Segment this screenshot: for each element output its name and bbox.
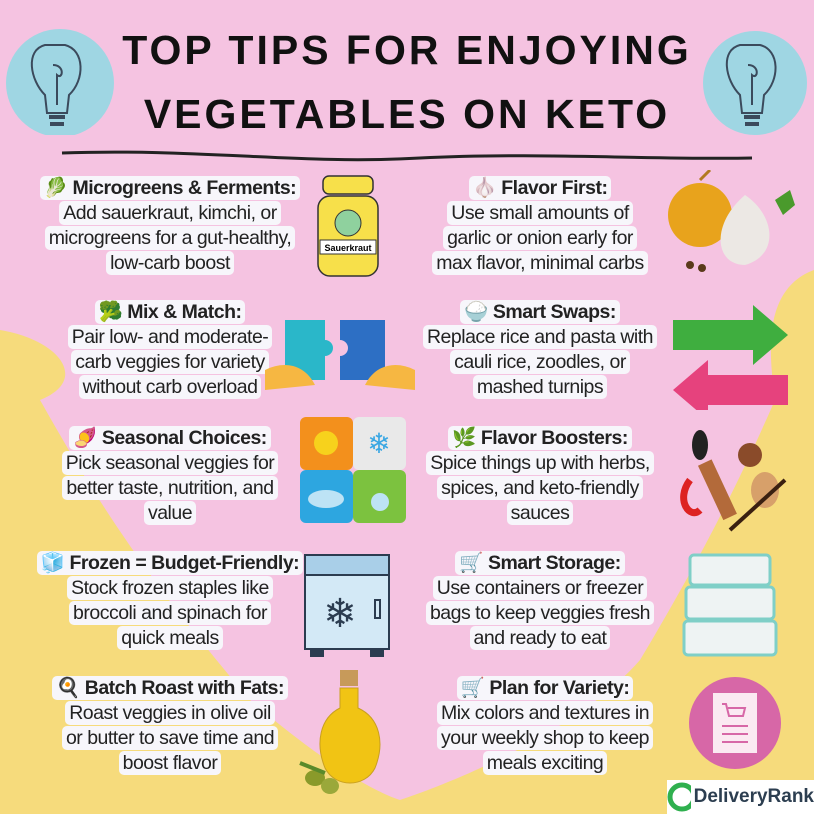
tip: frozen [37, 551, 303, 650]
icon: seasons grid [300, 417, 406, 523]
tip: smart swaps: 🍚 Smart Swaps: [464, 301, 616, 323]
tip: batch roast: or butter to save time and [66, 727, 274, 749]
icon: olive oil [299, 670, 380, 794]
icon: puzzle pieces [265, 320, 415, 390]
icon: swap arrows [673, 305, 788, 410]
tip: flavor first: 🧄 Flavor First: [473, 177, 607, 199]
icon: spices [680, 430, 786, 532]
tip: smart swaps: cauli rice, zoodles, or [454, 351, 626, 373]
tip: smart swaps: mashed turnips [477, 376, 603, 398]
tip: microgreens: 🥬 Microgreens & Ferments: [44, 177, 296, 199]
tip: smart storage: and ready to eat [474, 627, 606, 649]
tip: flavor first [432, 176, 648, 275]
tip: frozen: broccoli and spinach for [73, 602, 267, 624]
tip: plan for variety: Mix colors and textures in [441, 702, 649, 724]
tip: frozen: quick meals [121, 627, 219, 649]
title: VEGETABLES ON KETO [144, 91, 670, 137]
title [122, 27, 692, 137]
tip: microgreens: Add sauerkraut, kimchi, or [63, 202, 277, 224]
tip: seasonal: value [148, 502, 192, 524]
tip: flavor boosters: Spice things up with herbs, [430, 452, 650, 474]
icon: seasons grid: ❄ [367, 428, 391, 459]
icon: light bulb right [703, 31, 807, 135]
icon: shopping list [689, 677, 781, 769]
tip: smart swaps: Replace rice and pasta with [427, 326, 653, 348]
tip: seasonal: better taste, nutrition, and [66, 477, 274, 499]
icon: sauerkraut jar [317, 175, 379, 277]
icon: onion and garlic [668, 170, 795, 272]
tip: smart swaps [423, 300, 657, 399]
tip: batch roast: 🍳 Batch Roast with Fats: [56, 677, 284, 699]
tip: mix & match [68, 300, 272, 399]
tip: mix & match: carb veggies for variety [75, 351, 265, 373]
tip: plan for variety [437, 676, 653, 775]
tip: frozen: 🧊 Frozen = Budget-Friendly: [41, 552, 299, 574]
tip: smart storage: bags to keep veggies fresh [430, 602, 650, 624]
tip: smart storage [426, 551, 654, 650]
icon: freezer: ❄ [323, 592, 357, 636]
tip: flavor first: garlic or onion early for [447, 227, 633, 249]
tip: seasonal: Pick seasonal veggies for [66, 452, 274, 474]
tip: plan for variety: meals exciting [487, 752, 603, 774]
tip: smart storage: 🛒 Smart Storage: [459, 552, 621, 574]
tip: flavor first: max flavor, minimal carbs [436, 252, 644, 274]
tip: seasonal [62, 426, 278, 525]
tip: batch roast [52, 676, 288, 775]
tip: plan for variety: 🛒 Plan for Variety: [461, 677, 629, 699]
tip: frozen: Stock frozen staples like [71, 577, 269, 599]
tip: flavor boosters: spices, and keto-friendly [441, 477, 639, 499]
tip: mix & match: without carb overload [83, 376, 257, 398]
tip: flavor boosters: 🌿 Flavor Boosters: [452, 427, 628, 449]
tip: microgreens: microgreens for a gut-healthy, [49, 227, 291, 249]
icon: light bulb left [6, 29, 114, 135]
tip: batch roast: boost flavor [123, 752, 217, 774]
title: TOP TIPS FOR ENJOYING [122, 27, 692, 73]
logo: DeliveryRank [667, 780, 814, 814]
tip: microgreens: low-carb boost [110, 252, 230, 274]
tip: flavor boosters: sauces [511, 502, 569, 524]
tip: flavor boosters [426, 426, 654, 525]
tip: flavor first: Use small amounts of [451, 202, 629, 224]
tip: seasonal: 🍠 Seasonal Choices: [73, 427, 267, 449]
tip: plan for variety: your weekly shop to keep [441, 727, 649, 749]
tip: mix & match: 🥦 Mix & Match: [99, 301, 241, 323]
tip: microgreens [40, 176, 300, 275]
icon: sauerkraut jar: Sauerkraut [324, 243, 372, 253]
icon: containers [682, 554, 778, 656]
logo: DeliveryRank: DeliveryRank [694, 786, 814, 807]
tip: smart storage: Use containers or freezer [437, 577, 643, 599]
tip: batch roast: Roast veggies in olive oil [69, 702, 271, 724]
tip: mix & match: Pair low- and moderate- [72, 326, 268, 348]
icon: freezer [304, 554, 390, 657]
